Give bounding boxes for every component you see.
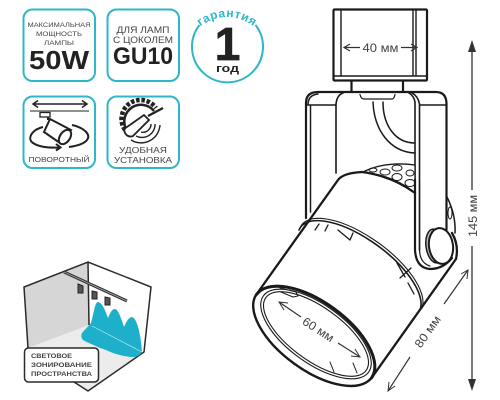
dimension: 60 mm: 60 мм	[300, 314, 337, 345]
caption box	[24, 348, 98, 382]
dimension: 80 mm: 80 мм	[412, 313, 444, 350]
dimension: 145 mm: 145 мм	[466, 195, 480, 237]
lamp body	[256, 172, 457, 384]
panel: easy installation: УДОБНАЯ	[119, 145, 167, 155]
panel: 50W power: 50W	[29, 45, 90, 75]
panel: GU10 socket: ДЛЯ ЛАМП	[116, 25, 170, 35]
icon: rotating spotlight	[30, 100, 89, 150]
front band	[299, 218, 423, 310]
badge: one-year warranty	[191, 10, 264, 84]
panel: easy installation: УСТАНОВКА	[114, 155, 172, 165]
panel: 50W power	[24, 10, 95, 81]
panel: rotating	[24, 96, 95, 168]
badge: one-year warranty: 1	[215, 18, 240, 70]
panel: 50W power: ЛАМПЫ	[44, 40, 74, 47]
track rail	[64, 272, 127, 301]
dimension: 40 mm: 40 мм	[362, 41, 398, 55]
badge: one-year warranty: гарантия	[198, 10, 256, 26]
panel: 50W power: МОЩНОСТЬ	[36, 31, 82, 38]
caption box: СВЕТОВОЕ	[31, 353, 73, 360]
illustration: room light zoning	[24, 262, 151, 391]
panel: GU10 socket	[108, 10, 179, 81]
icon: gear and screwdriver	[121, 100, 163, 143]
panel: rotating: ПОВОРОТНЫЙ	[28, 155, 90, 164]
rear dome with vents	[363, 164, 455, 233]
panel: 50W power: МАКСИМАЛЬНАЯ	[28, 22, 91, 29]
dimension: 40 mm	[344, 41, 417, 55]
blue light zones	[81, 302, 142, 357]
panel: GU10 socket: GU10	[113, 43, 173, 70]
panel: easy installation	[108, 96, 179, 168]
dimension: 60 mm	[279, 302, 360, 357]
rotation knob	[424, 227, 455, 265]
dimension: 80 mm	[388, 270, 468, 391]
track lamps	[78, 284, 110, 305]
dimension: 145 mm	[466, 40, 480, 391]
caption box: ЗОНИРОВАНИЕ	[31, 362, 93, 369]
track adapter	[334, 10, 427, 91]
illustration: track spotlight	[237, 10, 457, 400]
left wall	[24, 262, 89, 348]
mounting bracket	[306, 92, 446, 250]
caption box: ПРОСТРАНСТВА	[31, 371, 92, 378]
room floor	[28, 325, 144, 391]
right bracket arm	[415, 180, 452, 269]
badge: one-year warranty: год	[216, 63, 239, 75]
front ring	[237, 267, 391, 400]
panel: GU10 socket: С ЦОКОЛЕМ	[113, 35, 173, 45]
room outline	[24, 262, 151, 391]
